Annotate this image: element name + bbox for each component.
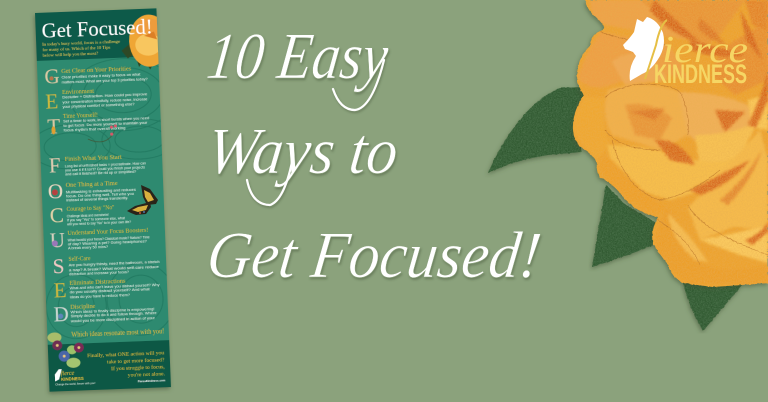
header band — [35, 8, 158, 61]
tip F: Finish What You Start — [65, 154, 122, 163]
poster title: Get Focused! — [41, 15, 153, 43]
tip T: to get focus. Do more yourself to maintain your — [63, 120, 148, 128]
page title: Get Focused! — [203, 219, 545, 292]
tip C: will you need to say "No" to in your own life? — [67, 219, 132, 226]
logo: Fierce Kindness — [623, 17, 748, 89]
tip E: your physical comfort or something else? — [63, 101, 135, 109]
tip E: Environment — [62, 88, 94, 96]
poster closing text: you're not alone. — [128, 371, 166, 379]
tip E: Declutter + Distraction. How could you improve — [62, 91, 148, 100]
tip E2 — [53, 274, 160, 302]
tip C: If you say "Yes" to someone else, what — [67, 215, 126, 222]
tip O: instead of several things transiently. — [66, 195, 128, 202]
tip C: Courage to Say "No" — [66, 204, 115, 213]
tip C — [49, 200, 132, 228]
tip T: T — [47, 114, 61, 139]
poster small flower — [122, 14, 159, 70]
tip E: your concentration mindfully, reduce noise, increase — [62, 96, 148, 105]
poster logo — [55, 365, 166, 386]
flower — [560, 0, 768, 300]
tip G: Clear priorities make it easy to focus on what — [61, 71, 141, 80]
footer flowers — [47, 331, 85, 369]
tip E2: What and who can't leave you distract yourself? Why — [69, 282, 160, 290]
icon: lion head — [623, 17, 664, 81]
page title: 10 Easy — [203, 20, 393, 93]
tip E2: ideas do you have to reduce them? — [70, 292, 131, 299]
tip F: Long list of unfinished tasks = procrastinate. How can — [65, 160, 146, 168]
poster closing text: Finally, what ONE action will you — [87, 350, 164, 359]
tip G: Get Clear on Your Priorities — [61, 65, 132, 75]
tip S — [52, 250, 160, 278]
poster logo: KINDNESS — [61, 376, 84, 382]
poster intro — [42, 39, 121, 58]
tip F: F — [48, 153, 61, 178]
tip U: A break every 50 mins? — [68, 244, 109, 250]
tip E: E — [45, 89, 59, 114]
tip F — [48, 150, 146, 178]
tip U: of day? Wearing a pet? Going headphones? — [68, 238, 148, 246]
tip G: G — [44, 64, 60, 89]
poster question: Which ideas resonate most with you! — [71, 328, 164, 339]
poster intro: below will help you the most? — [43, 51, 98, 58]
poster logo: Change the world, fiercer with you! — [55, 381, 96, 386]
tip E2: Eliminate Distractions — [69, 278, 126, 287]
tip O: O — [47, 179, 63, 204]
tip T: Set a timer to work, in short bursts when you need — [63, 115, 149, 123]
tip O: Multitasking is exhausting and reduces — [66, 187, 136, 194]
page title — [203, 20, 545, 292]
tip O — [47, 176, 136, 204]
tip E2: E — [53, 278, 67, 302]
tip U: What boosts your focus? Classical music? Nature? Time — [68, 234, 150, 242]
tip E — [45, 86, 149, 114]
tip U — [49, 225, 151, 253]
tip D: Which ideas to finally discipline is empowering! — [70, 306, 155, 314]
tip D: D — [53, 302, 69, 326]
leaf: bottom — [683, 283, 742, 331]
tip C: C — [49, 203, 64, 228]
tip S: S — [52, 254, 65, 278]
tip U: U — [49, 228, 65, 253]
tip O: focus. Do one thing well. Tell who you — [66, 191, 134, 198]
tip G — [44, 61, 149, 89]
tip F: and call it finished? Be rid up or simplified? — [65, 169, 137, 176]
poster closing text — [87, 350, 166, 380]
tip D: Discipline — [70, 303, 96, 311]
icon: butterfly — [127, 185, 158, 215]
central petals — [588, 152, 594, 158]
tip T — [47, 110, 150, 139]
footer band — [48, 340, 171, 392]
poster closing text: take to get more focused? — [107, 356, 165, 365]
poster intro: In today's busy world, focus is a challenge — [42, 39, 120, 48]
tip S: a nap? A break? What would self-care reduce — [69, 264, 160, 272]
tip T: Time Yourself! — [63, 112, 98, 120]
poster logo: fierce — [61, 370, 75, 377]
lower petals — [688, 130, 768, 240]
poster logo: FierceKindness.com — [138, 378, 166, 383]
poster: Get Focused bookmark — [32, 8, 172, 396]
tip F: you use it if it isn't? Could you finish your projects — [65, 164, 145, 172]
tip G: matters most. What are your top 3 priorities today? — [62, 76, 148, 85]
tip O: One Thing at a Time — [66, 180, 118, 189]
leaf: upper left — [488, 87, 590, 173]
logo word fierce: ierce — [662, 29, 748, 71]
tip D — [53, 299, 158, 326]
tip S: distraction and increase your focus? — [69, 269, 130, 276]
tip T: focus rhythm that overall working — [63, 125, 126, 132]
title swashes — [247, 60, 384, 205]
tip E2: do you usually distract yourself? And what — [70, 286, 151, 294]
tip D: would you be more disciplined in action of your — [71, 315, 156, 323]
poster intro: for many of us. Which of the 10 Tips — [42, 45, 111, 52]
logo stroke — [645, 20, 667, 79]
poster closing text: If you struggle to focus, — [111, 363, 165, 372]
leaf: middle — [592, 185, 658, 267]
tip D: Simply decide to do it and follow through. Where — [71, 310, 157, 318]
tip U: Understand Your Focus Boosters! — [67, 227, 149, 237]
tip S: Are you hungry thirsty, need the bathroom, a stretch — [69, 259, 160, 267]
tip C: Challenge ideas and overwhelm! — [67, 212, 109, 218]
page title: Ways to — [203, 115, 402, 188]
upper petals — [590, 0, 686, 40]
tip S: Self-Care — [68, 255, 91, 263]
icon: flower sprig — [87, 124, 117, 142]
